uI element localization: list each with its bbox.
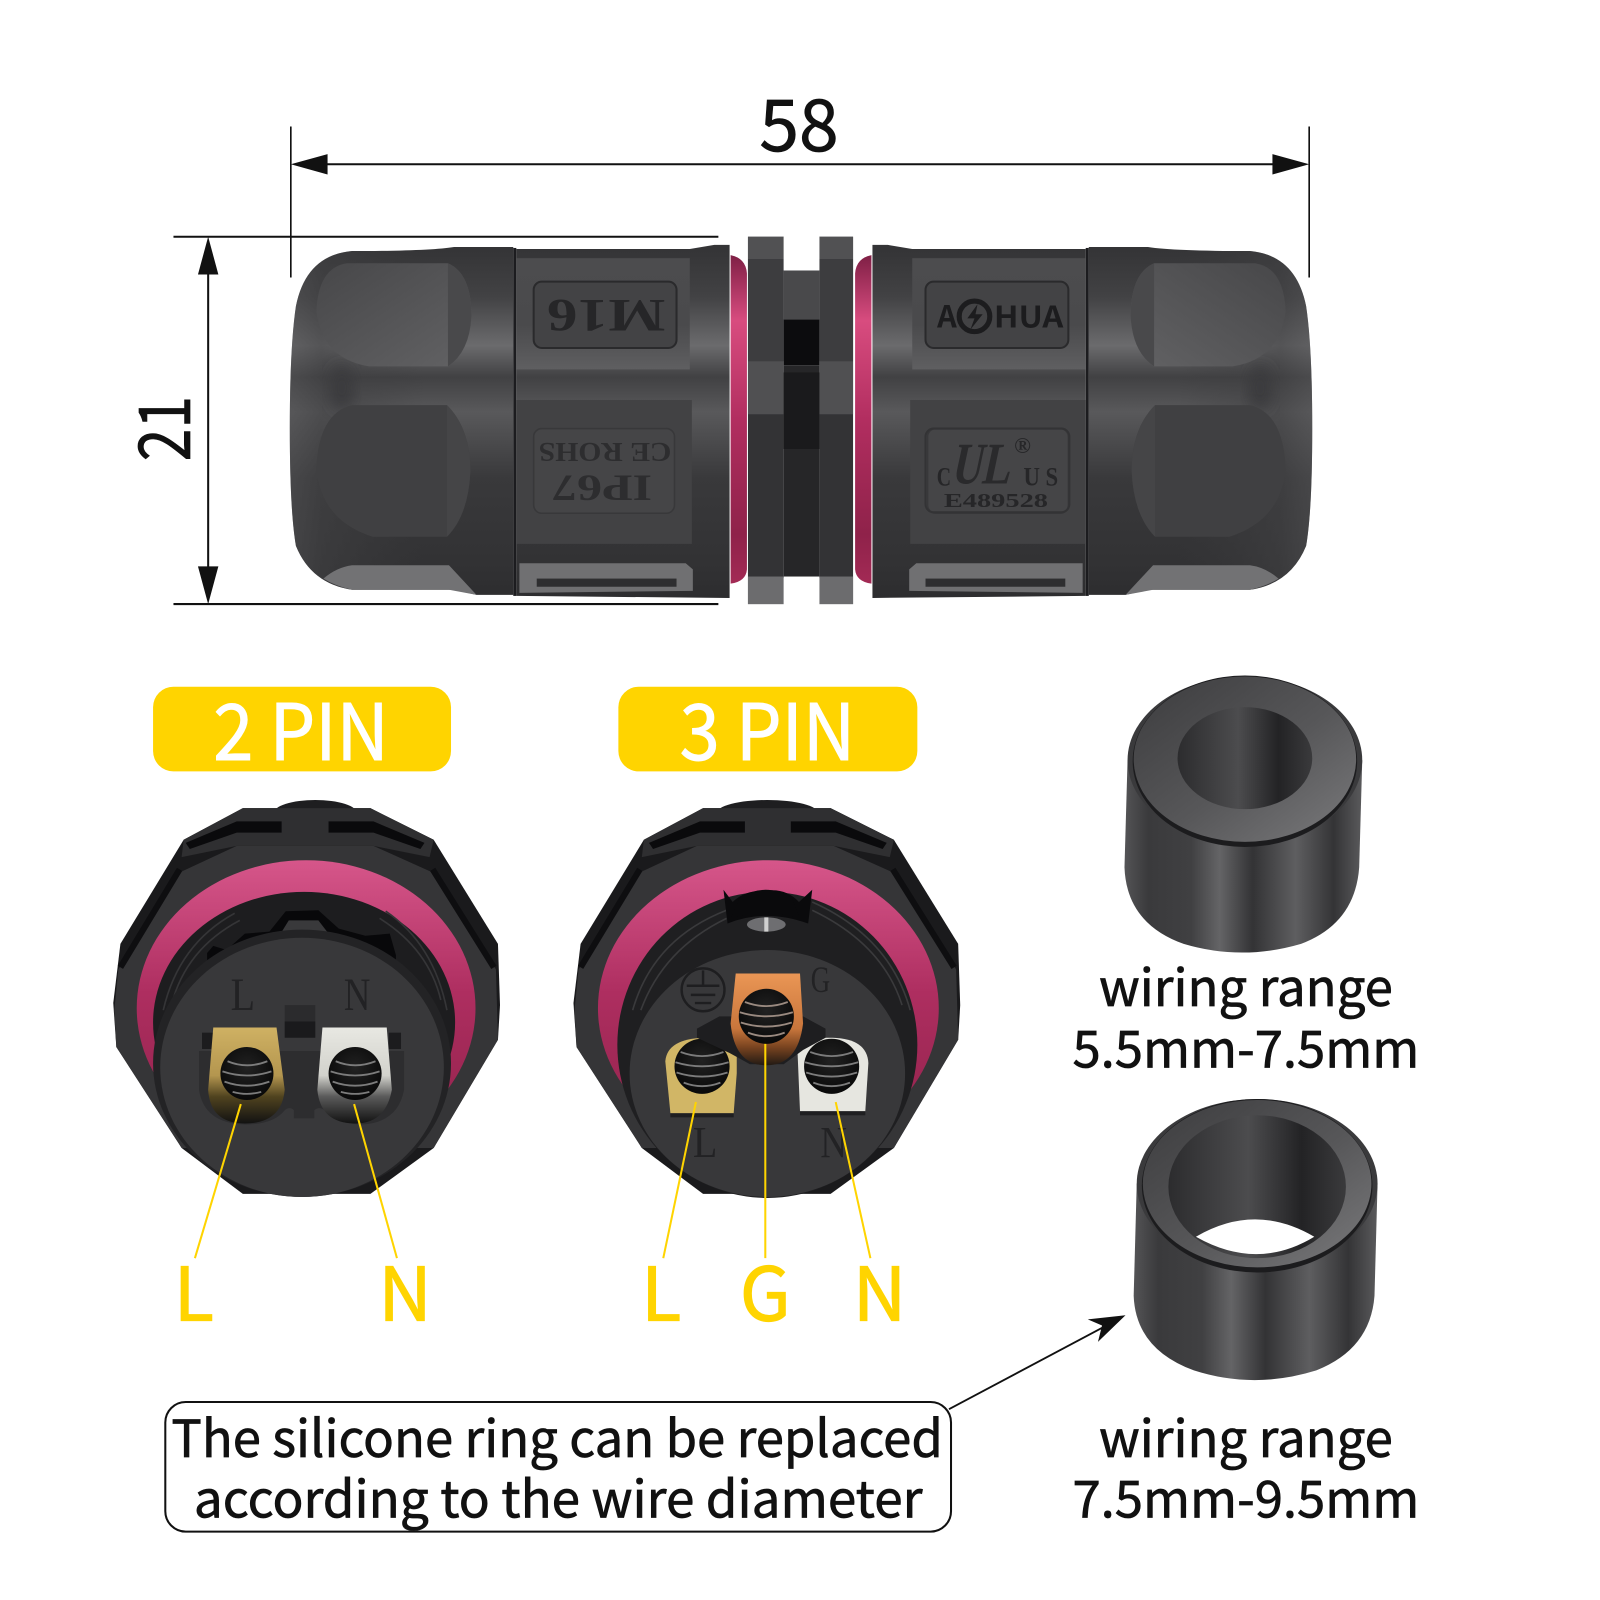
caption: small bore range: wiring range	[1099, 947, 1393, 1021]
plate: UL mark: ®	[1014, 433, 1031, 458]
left half of connector	[290, 245, 747, 598]
embossed logo: AOHUA: A	[936, 292, 957, 337]
dimension: width 58: 58	[759, 68, 839, 172]
terminal: N	[317, 1028, 392, 1123]
silicone ring: large bore	[1134, 1099, 1378, 1380]
3 pin connector front view	[573, 800, 960, 1198]
pin label: 2 pin N: N	[379, 1236, 432, 1342]
callout: replaceable silicone ring	[165, 1398, 951, 1532]
badge: 3 PIN	[618, 671, 917, 783]
moulded letter G: G	[811, 959, 830, 1000]
dimension: height 21: 21	[107, 396, 211, 461]
connector side view	[290, 237, 1312, 604]
moulded letter N: N	[820, 1117, 847, 1167]
moulded letter L: L	[231, 969, 255, 1021]
ground screw	[723, 890, 812, 932]
embossed logo: AOHUA	[936, 292, 1064, 337]
embossed mark: M16: M16	[547, 289, 665, 341]
terminal: L	[665, 1038, 737, 1117]
callout: replaceable silicone ring: according to the wire diameter	[194, 1458, 923, 1532]
ground symbol	[682, 968, 724, 1011]
terminal: N	[797, 1038, 868, 1115]
callout: replaceable silicone ring: The silicone ring can be replaced	[171, 1398, 943, 1472]
embossed logo: AOHUA: HUA	[994, 294, 1064, 337]
arrow: callout to ring	[949, 1315, 1126, 1409]
dimension: height 21	[107, 237, 718, 604]
terminal well	[697, 1016, 826, 1064]
leader lines	[195, 1044, 870, 1258]
pin label: 2 pin L: L	[174, 1236, 214, 1342]
2 pin connector front view	[113, 800, 500, 1197]
moulded letter L: L	[693, 1117, 717, 1167]
silicone ring: small bore	[1124, 676, 1362, 953]
centre coupling block	[748, 237, 853, 604]
centre key	[285, 1005, 315, 1038]
pin label: 3 pin L: L	[641, 1236, 681, 1342]
pin label: 3 pin N: N	[853, 1236, 906, 1342]
badge: 3 PIN: 3 PIN	[680, 671, 855, 783]
caption: small bore range: 5.5mm-7.5mm	[1072, 1008, 1419, 1082]
embossed mark: IP67: IP67	[552, 468, 652, 509]
caption: large bore range: 7.5mm-9.5mm	[1072, 1458, 1419, 1532]
terminal: L	[208, 1028, 285, 1123]
embossed mark: CE ROHS: CE ROHS	[539, 437, 671, 468]
badge: 2 PIN: 2 PIN	[213, 671, 389, 783]
silicone seal ring	[137, 860, 476, 1156]
silicone seal ring	[598, 860, 939, 1156]
plate: UL mark: UL	[947, 431, 1020, 497]
plate: UL mark	[926, 429, 1069, 512]
plate: UL mark: U S	[1023, 462, 1058, 492]
moulded letter N: N	[344, 969, 370, 1021]
right half of connector	[855, 245, 1312, 598]
terminal pocket	[199, 1051, 404, 1124]
terminal: G	[731, 973, 803, 1065]
pin label: 3 pin G: G	[740, 1236, 791, 1342]
plate: UL mark: E489528	[944, 490, 1048, 512]
plate: UL mark: C	[937, 462, 951, 492]
dimension: width 58	[291, 68, 1309, 278]
crown window	[207, 910, 396, 985]
badge: 2 PIN	[153, 671, 451, 783]
caption: large bore range: wiring range	[1099, 1398, 1393, 1472]
